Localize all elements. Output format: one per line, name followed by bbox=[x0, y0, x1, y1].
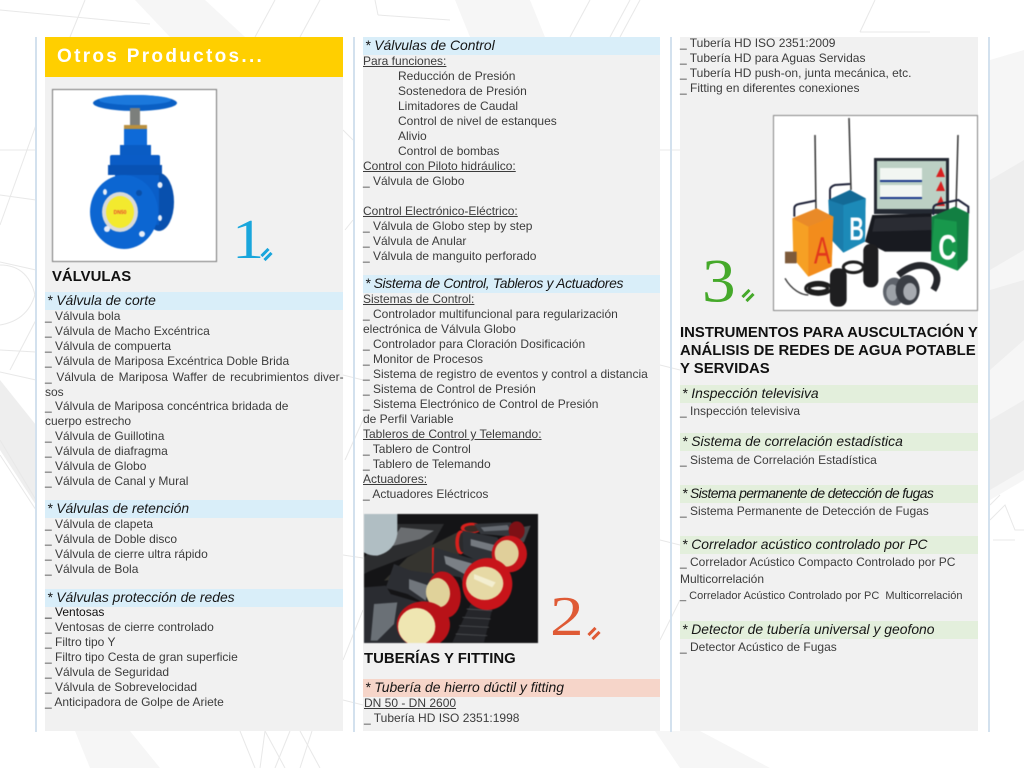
title banner bbox=[45, 37, 343, 77]
text: * Válvulas protección de redes bbox=[47, 589, 235, 605]
text: _ Tablero de Control bbox=[363, 442, 471, 456]
text: _ Sistema de registro de eventos y control a distancia bbox=[363, 367, 648, 381]
image: acoustic instruments: B bbox=[849, 211, 864, 247]
panel: column 1 valves bbox=[45, 37, 343, 731]
text: _ Sistema de Correlación Estadística bbox=[680, 453, 877, 467]
list: tuberia de hierro ductil bbox=[363, 679, 660, 725]
image: blue gate valve bbox=[51, 88, 218, 263]
text: Sostenedora de Presión bbox=[398, 84, 527, 98]
image: blue gate valve: DN50 bbox=[114, 210, 127, 216]
text: electrónica de Válvula Globo bbox=[363, 322, 516, 336]
number 3: 3 bbox=[702, 248, 736, 316]
text: _ Válvula de Bola bbox=[45, 562, 138, 576]
text: Control de nivel de estanques bbox=[398, 114, 557, 128]
text: _ Actuadores Eléctricos bbox=[363, 487, 488, 501]
text: _ Ventosas de cierre controlado bbox=[45, 620, 214, 634]
list: sistema de control, tableros y actuadores bbox=[362, 275, 660, 501]
text: _ Válvula de manguito perforado bbox=[363, 249, 536, 263]
text: * Sistema de correlación estadística bbox=[682, 433, 903, 449]
text: _ Controlador multifuncional para regularización bbox=[363, 307, 618, 321]
list: valvulas de retencion bbox=[44, 500, 343, 576]
text: _ Fitting en diferentes conexiones bbox=[680, 81, 859, 95]
text: _ Filtro tipo Y bbox=[45, 635, 115, 649]
text: * Válvulas de Control bbox=[365, 37, 495, 53]
heading: instruments bbox=[680, 324, 978, 377]
text: Control Electrónico-Eléctrico: bbox=[363, 204, 518, 218]
text: _ Válvula de Mariposa Waffer de recubrimientos diver- bbox=[45, 370, 344, 384]
list: inspeccion televisiva bbox=[680, 385, 978, 418]
number 2 bbox=[550, 586, 600, 648]
text: _ Válvula de Macho Excéntrica bbox=[45, 324, 210, 338]
text: _ Monitor de Procesos bbox=[363, 352, 483, 366]
text: Multicorrelación bbox=[680, 572, 764, 586]
text: sos bbox=[45, 385, 64, 399]
text: _ Controlador para Cloración Dosificación bbox=[363, 337, 585, 351]
text: Sistemas de Control: bbox=[363, 292, 474, 306]
text: Actuadores: bbox=[363, 472, 427, 486]
heading: instruments: ANÁLISIS DE REDES DE AGUA POTABLE bbox=[680, 343, 976, 359]
text: _ Inspección televisiva bbox=[680, 404, 800, 418]
text: de Perfil Variable bbox=[363, 412, 454, 426]
text: Reducción de Presión bbox=[398, 69, 515, 83]
text: _ Detector Acústico de Fugas bbox=[680, 640, 837, 654]
heading: pipes and fittings: TUBERÍAS Y FITTING bbox=[364, 651, 516, 667]
text: _ Anticipadora de Golpe de Ariete bbox=[45, 695, 224, 709]
divider line 1 bbox=[35, 37, 37, 732]
heading: instruments: INSTRUMENTOS PARA AUSCULTACIÓN Y bbox=[680, 325, 978, 341]
text: _ Válvula de clapeta bbox=[45, 517, 153, 531]
text: _ Tubería HD ISO 2351:2009 bbox=[680, 36, 835, 50]
text: _ Válvula de Globo bbox=[45, 459, 146, 473]
text: _ Válvula de Doble disco bbox=[45, 532, 177, 546]
text: _ Sistema de Control de Presión bbox=[363, 382, 536, 396]
title banner: Otros Productos... bbox=[57, 46, 264, 67]
image: ductile iron elbow fittings bbox=[363, 513, 539, 644]
text: _ Válvula de compuerta bbox=[45, 339, 171, 353]
text: DN 50 - DN 2600 bbox=[364, 696, 456, 710]
image: acoustic instruments: A bbox=[814, 229, 831, 272]
text: _ Sistema Electrónico de Control de Presión bbox=[363, 397, 598, 411]
text: _ Válvula de Seguridad bbox=[45, 665, 169, 679]
text: Tableros de Control y Telemando: bbox=[363, 427, 542, 441]
list: correlador acustico bbox=[680, 536, 978, 602]
heading: valves: VÁLVULAS bbox=[52, 269, 131, 285]
text: _ Válvula de Mariposa Excéntrica Doble Brida bbox=[45, 354, 289, 368]
panel: column 3 instruments bbox=[680, 37, 978, 731]
text: _ Válvula de Anular bbox=[363, 234, 466, 248]
text: _ Tubería HD push-on, junta mecánica, etc. bbox=[680, 66, 911, 80]
number 3 bbox=[702, 248, 754, 316]
divider line 3 bbox=[670, 37, 672, 732]
list: detector de tuberia bbox=[680, 621, 978, 654]
text: Para funciones: bbox=[363, 54, 446, 68]
text: Limitadores de Caudal bbox=[398, 99, 518, 113]
text: Control con Piloto hidráulico: bbox=[363, 159, 516, 173]
list: valvula de corte bbox=[44, 292, 344, 488]
text: _ Sistema Permanente de Detección de Fugas bbox=[680, 504, 929, 518]
text: * Detector de tubería universal y geofono bbox=[682, 621, 935, 637]
text: _ Válvula de diafragma bbox=[45, 444, 168, 458]
text: _ Ventosas bbox=[45, 605, 104, 619]
image: acoustic instruments bbox=[772, 114, 979, 312]
text: _ Válvula de Mariposa concéntrica bridada de bbox=[45, 399, 288, 413]
text: * Válvulas de retención bbox=[47, 500, 189, 516]
text: _ Válvula de Globo bbox=[363, 174, 464, 188]
text: _ Válvula de Canal y Mural bbox=[45, 474, 188, 488]
text: _ Válvula bola bbox=[45, 309, 120, 323]
number 1: 1 bbox=[232, 209, 264, 271]
text: _ Tablero de Telemando bbox=[363, 457, 491, 471]
text: * Tubería de hierro dúctil y fitting bbox=[365, 679, 564, 695]
text: Control de bombas bbox=[398, 144, 499, 158]
list: sistema permanente bbox=[680, 485, 978, 518]
text: * Válvula de corte bbox=[47, 292, 156, 308]
text: _ Filtro tipo Cesta de gran superficie bbox=[45, 650, 238, 664]
image: acoustic instruments: C bbox=[938, 228, 956, 267]
text: cuerpo estrecho bbox=[45, 414, 131, 428]
text: _ Válvula de Sobrevelocidad bbox=[45, 680, 197, 694]
text: * Correlador acústico controlado por PC bbox=[682, 536, 928, 552]
text: _ Válvula de Guillotina bbox=[45, 429, 164, 443]
text: _ Válvula de Globo step by step bbox=[363, 219, 532, 233]
text: _ Correlador Acústico Compacto Controlado por PC bbox=[680, 555, 955, 569]
text: _ Tubería HD para Aguas Servidas bbox=[680, 51, 865, 65]
text: * Sistema de Control, Tableros y Actuadores bbox=[365, 275, 623, 291]
text: * Sistema permanente de detección de fugas bbox=[682, 485, 933, 501]
list: valvulas proteccion de redes bbox=[44, 589, 343, 709]
text: _ Correlador Acústico Controlado por PC Multicorrelación bbox=[680, 590, 962, 602]
text: * Inspección televisiva bbox=[682, 385, 819, 401]
list: sistema de correlacion estadistica bbox=[680, 433, 978, 467]
list: pipe continuation bbox=[680, 36, 911, 95]
panel: column 2 controls and pipes bbox=[363, 37, 660, 731]
divider line 4 bbox=[988, 37, 990, 732]
text: Alivio bbox=[398, 129, 427, 143]
text: _ Válvula de cierre ultra rápido bbox=[45, 547, 208, 561]
text: _ Tubería HD ISO 2351:1998 bbox=[364, 711, 519, 725]
number 2: 2 bbox=[550, 586, 584, 648]
divider line 2 bbox=[353, 37, 355, 732]
heading: instruments: Y SERVIDAS bbox=[680, 361, 770, 377]
list: valvulas de control bbox=[362, 37, 660, 263]
